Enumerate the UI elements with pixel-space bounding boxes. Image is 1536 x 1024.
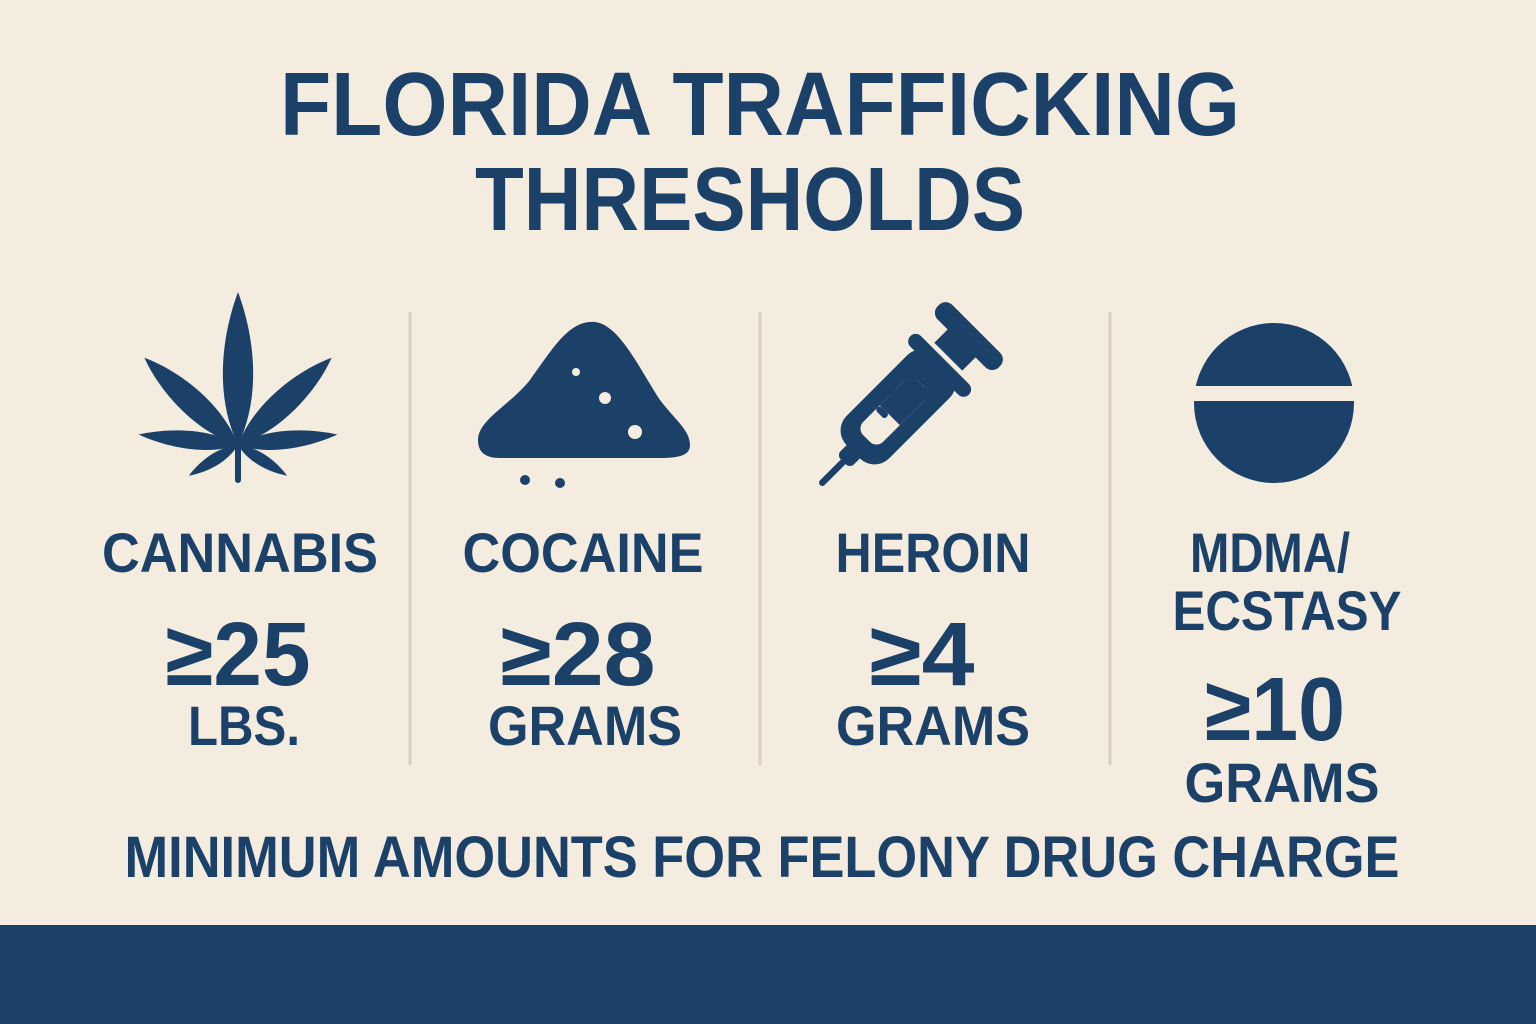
icon: powder pile [478, 322, 690, 488]
panel: heroin [789, 298, 1030, 757]
panel: mdma: MDMA/ [1190, 521, 1350, 584]
panel: mdma [1172, 323, 1402, 814]
footer bar [0, 925, 1536, 1024]
panel: mdma: ≥10 [1205, 660, 1345, 760]
panel: cannabis: CANNABIS [102, 521, 378, 584]
panel: mdma: GRAMS [1184, 751, 1380, 814]
panel: heroin: GRAMS [836, 694, 1030, 757]
title [280, 55, 1240, 250]
panel: cannabis [102, 292, 378, 757]
icon: pill [1190, 323, 1360, 483]
panel: cannabis: ≥25 [166, 605, 310, 705]
icon: cannabis leaf [136, 292, 340, 483]
panel: cannabis: LBS. [188, 694, 300, 757]
icon: syringe [789, 298, 1007, 516]
panel: cocaine: ≥28 [500, 605, 656, 705]
panel: heroin: ≥4 [870, 605, 974, 705]
panel: cocaine: COCAINE [462, 521, 704, 584]
panel: heroin: HEROIN [836, 521, 1030, 584]
title: FLORIDA TRAFFICKING [280, 55, 1240, 155]
panel: cocaine: GRAMS [488, 694, 682, 757]
panel: mdma: ECSTASY [1172, 579, 1402, 642]
title: THRESHOLDS [475, 150, 1025, 250]
subtitle: MINIMUM AMOUNTS FOR FELONY DRUG CHARGE [124, 825, 1400, 890]
panel: cocaine [462, 322, 704, 757]
